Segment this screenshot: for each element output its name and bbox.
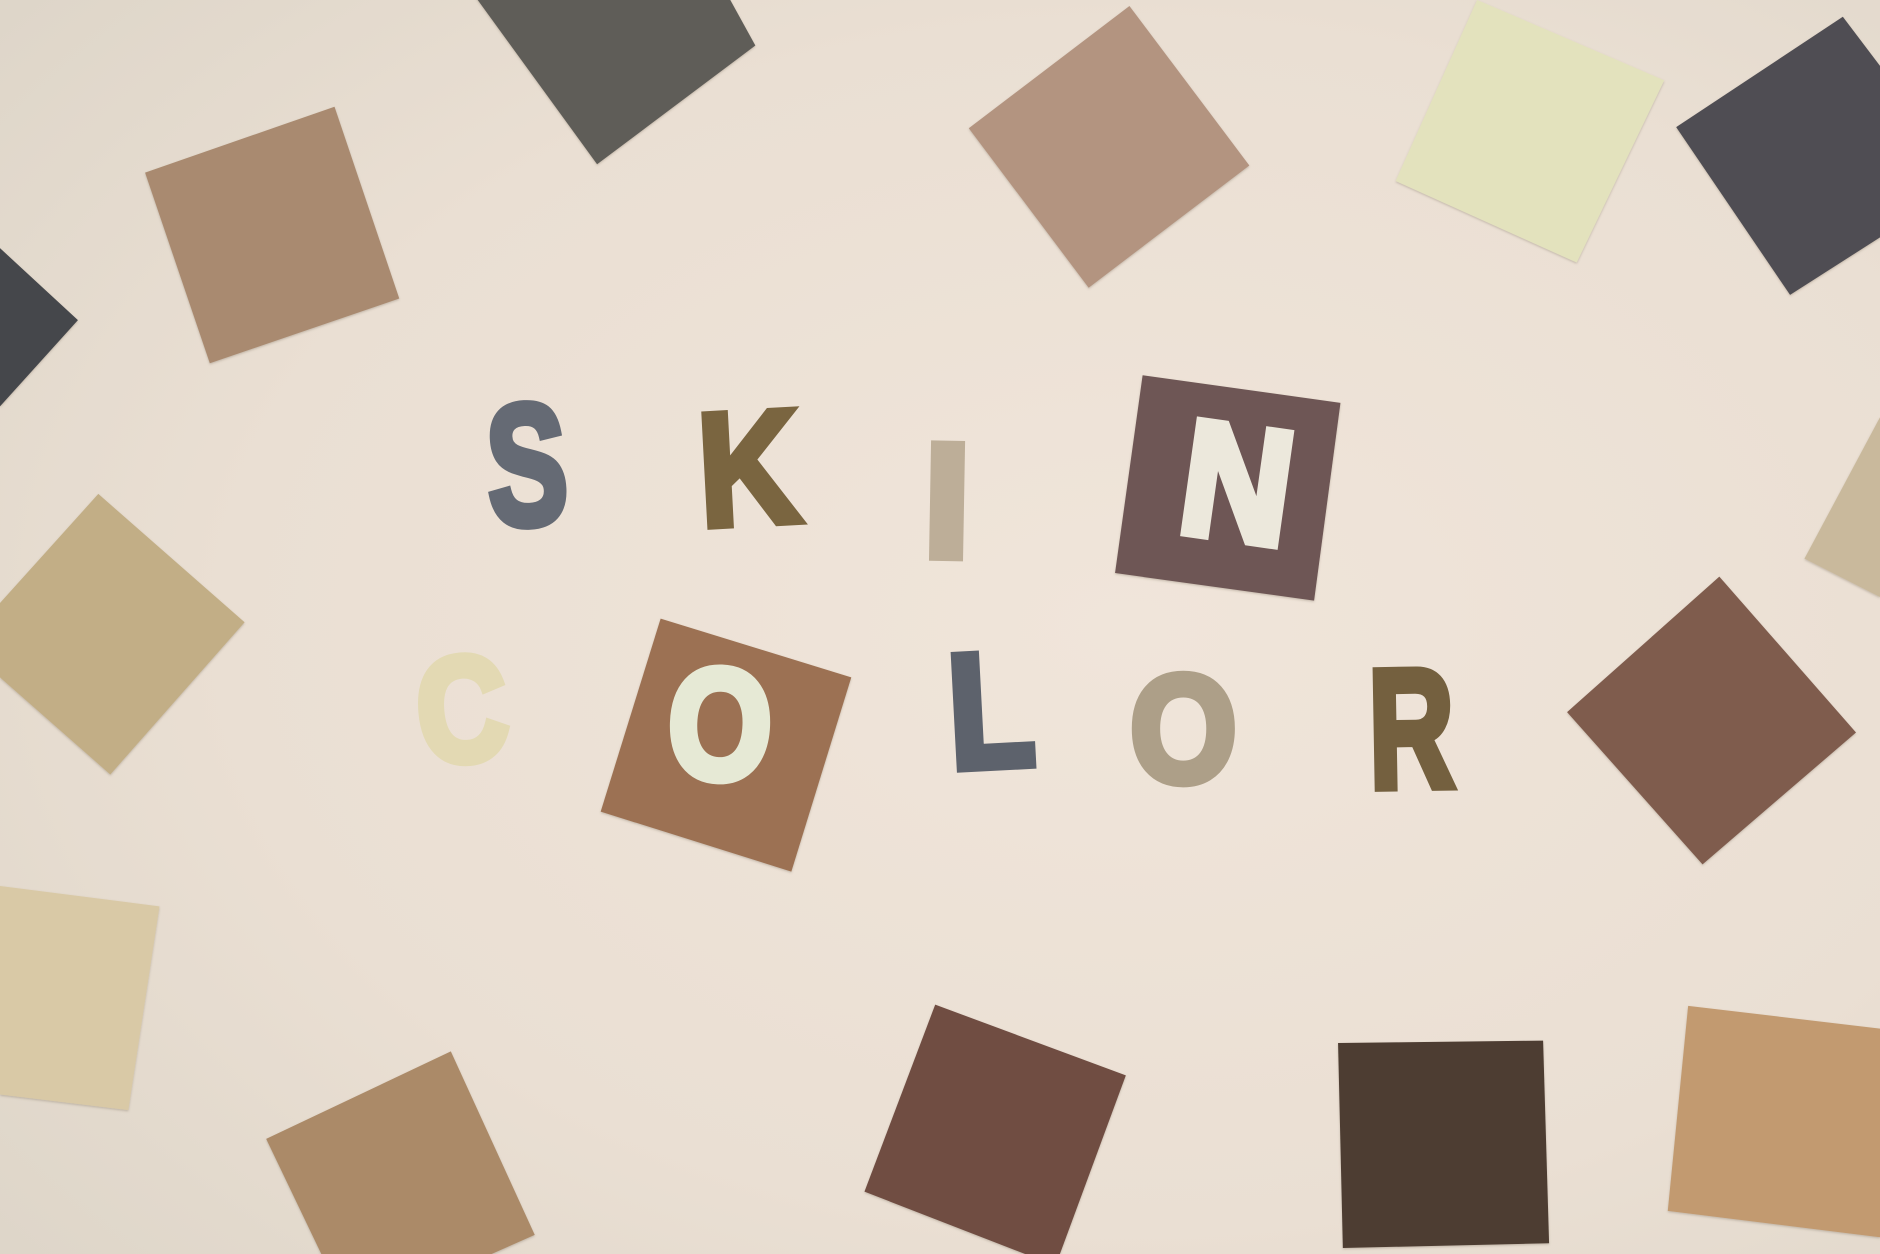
letter N: N (1170, 387, 1304, 581)
letter R: R (1367, 633, 1456, 824)
letter I: I (913, 403, 982, 600)
swatch: orange tan bottom right (1668, 1006, 1880, 1237)
backing square: N (1115, 375, 1340, 601)
swatch: mauve top (969, 6, 1249, 288)
swatch: dark slate top right (1676, 17, 1880, 295)
swatch: pale yellow (1396, 0, 1664, 263)
swatch: tan upper left (145, 107, 399, 363)
swatch: brown diamond right (1567, 577, 1856, 864)
letter C: C (410, 623, 514, 795)
title: SKIN (482, 368, 1304, 600)
letter O on square: O (666, 635, 775, 813)
swatch: dark brown bottom (1338, 1041, 1549, 1248)
letter L: L (944, 617, 1038, 803)
letter S: S (482, 368, 572, 563)
swatch: cream lower left (0, 886, 159, 1110)
backing square: O (601, 619, 851, 872)
title: COLOR (410, 617, 1456, 824)
swatch: sand right edge (1804, 417, 1880, 597)
swatch: maroon bottom (864, 1005, 1126, 1254)
swatch: tan bottom left (266, 1051, 535, 1254)
swatch: khaki left (0, 494, 245, 774)
letter K: K (693, 376, 804, 562)
swatch: top dark gray (476, 0, 755, 164)
letter O tan: O (1131, 645, 1236, 814)
swatch: dark slate left edge (0, 248, 78, 406)
